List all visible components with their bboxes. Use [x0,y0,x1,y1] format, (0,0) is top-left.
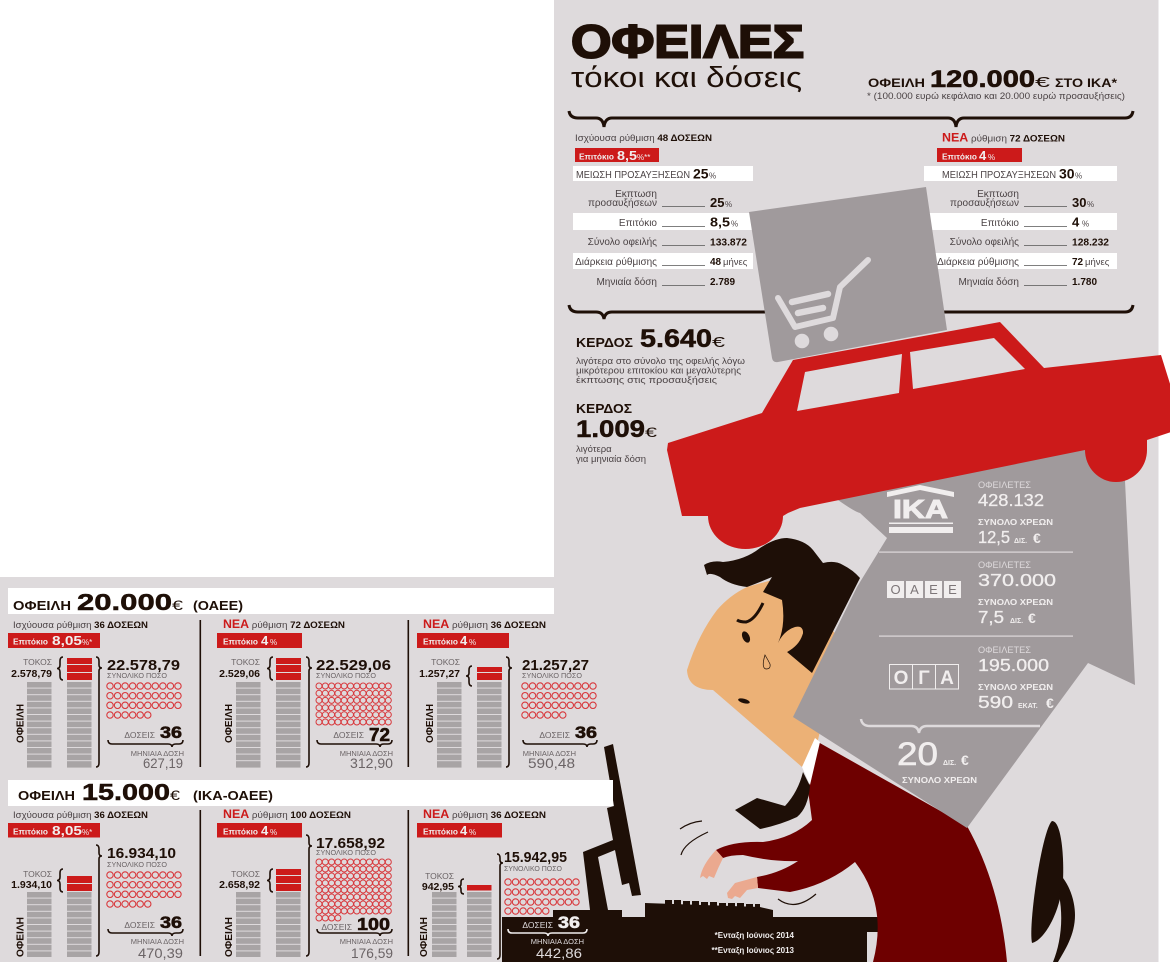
panel: new 72 instalments: ΝΕΑ ρύθμιση 72 ΔΟΣΕΩΝ [942,130,1065,144]
stats: OAEE: € [1028,610,1036,626]
panel: new 72 instalments: % [988,153,995,162]
logo: OAEE: Ε [948,582,957,597]
panel: current 48 instalments: %** [637,153,650,162]
panel: 20.000 new 72: 22.529,06 [316,657,391,674]
total debts: ΔΙΣ. [943,760,956,767]
panel: 20.000 new 72: ΝΕΑ ρύθμιση 72 ΔΟΣΕΩΝ [223,617,345,631]
icon: shopping cart square [749,187,947,362]
gain 5.640: έκπτωσης στις προσαυξήσεις [576,375,717,386]
panel: 20.000 new 36: % [469,638,476,647]
panel: current 48 instalments: % [709,172,716,180]
gain 1.009: για μηνιαία δόση [576,454,646,465]
bar: debt 20.000 OAEE: 20.000 [77,589,172,615]
panel: 15.000 current 36: ΜΗΝΙΑΙΑ ΔΟΣΗ [131,937,184,946]
panel: new 72 instalments: 4 [979,148,987,163]
top brace [569,111,1133,127]
illustration: hair [704,538,860,673]
panel: 20.000 current 36: ΟΦΕΙΛΗ [16,704,26,743]
panel: 15.000 new 36: 442,86 [536,946,582,961]
panel: new 72 instalments [924,130,1117,288]
panel: 20.000 new 72: 4 [261,633,269,648]
panel: 15.000 new 100: % [270,828,277,837]
gain 5.640: μικρότερου επιτοκίου και μεγαλύτερης [576,366,741,376]
logo: OAEE: Ε [929,582,938,597]
panel: 15.000 new 36: ΣΥΝΟΛΙΚΟ ΠΟΣΟ [504,864,562,873]
panel: 15.000 current 36: ΔΟΣΕΙΣ [124,920,155,930]
panel: 15.000 new 100: Επιτόκιο [223,826,258,836]
panel: big arrow of debts [793,440,1135,828]
logo: OAEE: Α [910,582,919,597]
illustration: plant [1031,821,1075,962]
panel: 20.000 new 72: ΜΗΝΙΑΙΑ ΔΟΣΗ [340,749,393,758]
eye, brow, mouth, tear [737,603,763,622]
panel: new 72 instalments: % [1075,172,1082,180]
logo: IKA [887,485,954,533]
stats: OGA: ΟΦΕΙΛΕΤΕΣ [978,645,1031,655]
panel: 15.000 new 36: 15.942,95 [504,849,567,866]
stats: OAEE: 370.000 [978,570,1056,590]
panel: current 48 instalments: 48 [710,257,722,268]
bar: debt 15.000 IKA-OAEE: € [170,787,180,803]
panel: 20.000 new 72: ΟΦΕΙΛΗ [224,704,235,743]
panel: 20.000 new 36: ΝΕΑ ρύθμιση 36 ΔΟΣΕΩΝ [423,617,546,631]
footnotes: **Ενταξη Ιούνιος 2013 [712,946,795,955]
stats: IKA: ΟΦΕΙΛΕΤΕΣ [978,480,1031,490]
heading: debt 120.000: 120.000 [930,66,1035,93]
gain 5.640: 5.640 [640,325,712,353]
title: τόκοι και δόσεις [571,62,802,94]
panel: current 48 instalments: 25 [710,195,724,210]
panel: 15.000 current 36: Ισχύουσα ρύθμιση 36 ΔΟΣΕΩΝ [13,810,148,821]
stats: OGA: € [1046,695,1054,711]
stats: IKA: ΔΙΣ. [1014,538,1027,545]
panel: 20.000 new 36: 1.257,27 [419,668,460,680]
bar: debt 15.000 IKA-OAEE: 15.000 [82,779,170,805]
gain 5.640: λιγότερα στο σύνολο της οφειλής λόγω [576,356,746,367]
panel: current 48 instalments [573,133,753,288]
panel: 15.000 new 36: 36 [558,913,580,932]
panel: 20.000 current 36: ΤΟΚΟΣ [23,657,52,667]
logo: OAEE [887,581,961,598]
panel: 15.000 current 36: ΤΟΚΟΣ [23,869,52,879]
panel: current 48 instalments: Επιτόκιο [579,152,614,162]
stats: OAEE: ΔΙΣ. [1010,618,1023,625]
bar: debt 20.000 OAEE: € [172,597,183,613]
total debts: ΣΥΝΟΛΟ ΧΡΕΩΝ [902,775,977,785]
logo: OGA [890,664,958,689]
panel: 15.000 new 100: 176,59 [351,946,393,961]
stats: OAEE: 7,5 [978,607,1004,627]
panel: 15.000 new 100: ΝΕΑ ρύθμιση 100 ΔΟΣΕΩΝ [223,807,351,821]
panel: new 72 instalments: ΜΕΙΩΣΗ ΠΡΟΣΑΥΞΗΣΕΩΝ [942,170,1056,181]
panel: 15.000 new 100: ΤΟΚΟΣ [231,869,260,879]
logo: OAEE: Ο [890,582,901,597]
illustration: man [680,575,1007,962]
panel: 15.000 new 100: 100 [357,914,390,934]
gain 1.009: € [645,424,657,440]
bar: debt 20.000 OAEE: (ΟΑΕΕ) [193,598,243,613]
panel: 15.000 current 36: ΣΥΝΟΛΙΚΟ ΠΟΣΟ [107,860,167,869]
panel: 15.000 current 36: Επιτόκιο [13,826,48,836]
stats: OAEE [978,560,1056,627]
gain 5.640 [576,325,746,386]
panel: 20.000 new 36 [417,617,597,771]
tie [735,772,810,829]
panel: new 72 instalments: Μηνιαία δόση [958,276,1019,288]
panel: current 48 instalments: ΜΕΙΩΣΗ ΠΡΟΣΑΥΞΗΣΕΩΝ [576,170,690,181]
bar: debt 15.000 IKA-OAEE [8,779,613,806]
panel: 15.000 new 100 [217,807,409,961]
panel: 20.000 new 36: ΜΗΝΙΑΙΑ ΔΟΣΗ [523,749,576,758]
heading: debt 120.000: ΟΦΕΙΛΗ [868,76,925,90]
heading: debt 120.000: ΣΤΟ ΙΚΑ* [1055,76,1117,90]
logo: OGA: Α [940,668,954,689]
stats: OGA: 590 [978,692,1013,712]
panel: current 48 instalments: Μηνιαία δόση [596,276,657,288]
total debts [897,736,977,785]
panel: 20.000 new 36: ΤΟΚΟΣ [431,657,460,667]
panel: 20.000 new 72: 312,90 [350,756,393,771]
title [571,16,804,94]
total debts: 20 [897,736,938,772]
gain 1.009: ΚΕΡΔΟΣ [576,401,632,416]
panel: 20.000 new 36: 590,48 [528,756,575,771]
panel: current 48 instalments: 25 [693,166,709,182]
logo: OGA: Ο [894,668,908,689]
panel: 15.000 current 36: 8,05 [52,823,82,838]
gain 1.009: λιγότερα [576,444,612,455]
panel: 15.000 new 36: ΤΟΚΟΣ [425,871,454,881]
panel: 20.000 current 36: %* [82,638,92,647]
heading: debt 120.000: € [1035,74,1051,91]
panel: 15.000 new 100: ΣΥΝΟΛΙΚΟ ΠΟΣΟ [316,848,376,857]
panel: 15.000 current 36: ΟΦΕΙΛΗ [16,917,26,957]
panel: 20.000 current 36: Επιτόκιο [13,636,48,646]
panel: 15.000 new 36: % [469,828,476,837]
panel: 15.000 new 36: 942,95 [422,881,454,893]
panel: new 72 instalments: 4 [1072,214,1080,230]
face [687,575,840,767]
stats: IKA: 428.132 [978,490,1044,510]
panel: 20.000 new 72: Επιτόκιο [223,636,258,646]
panel: 15.000 current 36: 1.934,10 [11,879,52,891]
suit [716,742,1007,962]
stats: OGA: ΕΚΑΤ. [1018,703,1038,710]
panel: new 72 instalments: 128.232 [1072,238,1109,248]
panel: new 72 instalments: μήνες [1085,257,1110,268]
panel: new 72 instalments: % [1087,200,1094,209]
panel: current 48 instalments: 133.872 [710,238,747,248]
panel: current 48 instalments: % [731,220,738,228]
panel: new 72 instalments: Σύνολο οφειλής [950,236,1019,248]
panel: 20.000 current 36: 8,05 [52,633,82,648]
panel: new 72 instalments: Διάρκεια ρύθμισης [937,256,1019,268]
panel: current 48 instalments: 8,5 [710,214,730,230]
panel: 15.000 new 36: ΜΗΝΙΑΙΑ ΔΟΣΗ [531,937,584,946]
panel: 20.000 new 72: % [270,638,277,647]
panel: current 48 instalments: % [725,200,732,209]
panel: 15.000 new 36: 4 [460,823,468,838]
illustration: red car [667,322,1170,549]
panel: 20.000 new 72: 72 [369,725,390,745]
stats: IKA: ΣΥΝΟΛΟ ΧΡΕΩΝ [978,517,1053,527]
stats: OGA: 195.000 [978,655,1049,675]
panel: new 72 instalments: % [1082,220,1089,228]
panel: 15.000 new 36: ΝΕΑ ρύθμιση 36 ΔΟΣΕΩΝ [423,807,546,821]
logo: IKA: ΙΚΑ [893,494,948,524]
panel: current 48 instalments: Σύνολο οφειλής [588,236,657,248]
shirt collar [802,738,820,785]
panel: 15.000 current 36: %* [82,828,92,837]
stats: OGA: ΣΥΝΟΛΟ ΧΡΕΩΝ [978,682,1053,692]
panel: 20.000 new 72: ΣΥΝΟΛΙΚΟ ΠΟΣΟ [316,671,376,680]
panel: 20.000 new 36: 4 [460,633,468,648]
panel: 20.000 new 72: ΤΟΚΟΣ [231,657,260,667]
panel: 20.000 new 36: Επιτόκιο [423,636,458,646]
panel: 15.000 current 36 [8,810,201,961]
footnotes [712,931,795,955]
panel: 15.000 new 100: 4 [261,823,269,838]
stats: OAEE: ΣΥΝΟΛΟ ΧΡΕΩΝ [978,597,1053,607]
gain 1.009: 1.009 [576,416,645,443]
panel: 15.000 current 36: 470,39 [138,946,183,961]
panel: new 72 instalments: 30 [1072,195,1086,210]
panel: 15.000 new 100: ΔΟΣΕΙΣ [321,922,352,932]
panel: current 48 instalments: 2.789 [710,277,735,288]
panel: 15.000 new 36: ΔΟΣΕΙΣ [522,920,553,930]
title: ΟΦΕΙΛΕΣ [571,16,804,68]
panel: 15.000 new 100: 2.658,92 [219,879,260,891]
panel: 15.000 new 100: 17.658,92 [316,835,385,852]
panel: current 48 instalments: Διάρκεια ρύθμισης [575,256,657,268]
stats: OAEE: ΟΦΕΙΛΕΤΕΣ [978,560,1031,570]
panel: 20.000 current 36 [8,620,201,771]
footnotes: *Ενταξη Ιούνιος 2014 [715,931,795,940]
panel: 20.000 new 72: ΔΟΣΕΙΣ [333,730,364,740]
hands [700,850,758,899]
stats: OGA [978,645,1054,712]
illustration: monitor and desk [502,744,880,962]
gain 5.640: € [712,334,726,351]
panel: new 72 instalments: προσαυξήσεων [950,197,1019,209]
panel: 15.000 new 36: ΟΦΕΙΛΗ [419,917,430,957]
panel: current 48 instalments: μήνες [723,257,748,268]
gain 1.009 [576,401,657,465]
panel: 20.000 current 36: ΔΟΣΕΙΣ [124,730,155,740]
panel: 15.000 new 100: ΜΗΝΙΑΙΑ ΔΟΣΗ [340,937,393,946]
panel: 20.000 current 36: 627,19 [143,756,183,771]
panel: current 48 instalments: προσαυξήσεων [588,197,657,209]
panel: current 48 instalments: Ισχύουσα ρύθμιση 48 ΔΟΣΕΩΝ [575,133,712,144]
panel: 15.000 new 100: ΟΦΕΙΛΗ [224,917,235,957]
stats: IKA [978,480,1053,547]
panel: 15.000 current 36: 36 [160,913,182,932]
panel: 20.000 new 36: ΔΟΣΕΙΣ [539,730,570,740]
logo: OGA: Γ [918,668,930,689]
panel: new 72 instalments: Εκπτωση [977,189,1019,200]
total debts: € [961,752,969,768]
panel: new 72 instalments: Επιτόκιο [981,217,1019,229]
panel: 20.000 current 36: Ισχύουσα ρύθμιση 36 ΔΟΣΕΩΝ [13,620,148,631]
panel: 20.000 new 36: ΣΥΝΟΛΙΚΟ ΠΟΣΟ [522,671,582,680]
stats: IKA: € [1033,530,1041,546]
panel: current 48 instalments: Επιτόκιο [619,217,657,229]
bar: debt 15.000 IKA-OAEE: (ΙΚΑ-ΟΑΕΕ) [193,788,273,803]
stats: IKA: 12,5 [978,527,1010,547]
panel: 20.000 current 36: 36 [160,723,182,742]
panel: 20.000 new 36: ΟΦΕΙΛΗ [425,704,436,743]
panel: new 72 instalments: 72 [1072,257,1084,268]
motion lines [680,821,816,904]
bar: debt 20.000 OAEE [8,588,554,615]
panel: 15.000 new 36 [417,807,587,961]
panel: 20.000 current 36: ΜΗΝΙΑΙΑ ΔΟΣΗ [131,749,184,758]
heading: debt 120.000 [867,66,1125,102]
panel: 20.000 new 72: 2.529,06 [219,668,260,680]
lower brace [569,305,1133,319]
panel: current 48 instalments: 8,5 [617,148,637,163]
panel: 20.000 current 36: 22.578,79 [107,657,180,674]
panel: 20.000 current 36: ΣΥΝΟΛΙΚΟ ΠΟΣΟ [107,671,167,680]
panel: 20.000 current 36: 2.578,79 [11,668,52,680]
bar: debt 20.000 OAEE: ΟΦΕΙΛΗ [13,598,71,613]
panel: 20.000 new 36: 21.257,27 [522,657,589,674]
panel: 15.000 current 36: 16.934,10 [107,845,176,862]
bar: debt 15.000 IKA-OAEE: ΟΦΕΙΛΗ [18,788,75,803]
panel: 15.000 new 36: Επιτόκιο [423,826,458,836]
panel: new 72 instalments: Επιτόκιο [942,152,977,162]
brace: total [861,719,1040,733]
gain 5.640: ΚΕΡΔΟΣ [576,335,633,350]
heading: debt 120.000: * (100.000 ευρώ κεφάλαιο και 20.000 ευρώ προσαυξήσεις) [867,91,1125,102]
panel: 20.000 new 72 [217,617,409,771]
panel: current 48 instalments: Εκπτωση [615,189,657,200]
panel: new 72 instalments: 1.780 [1072,277,1097,288]
panel: new 72 instalments: 30 [1059,166,1075,182]
panel: 20.000 new 36: 36 [575,723,597,742]
